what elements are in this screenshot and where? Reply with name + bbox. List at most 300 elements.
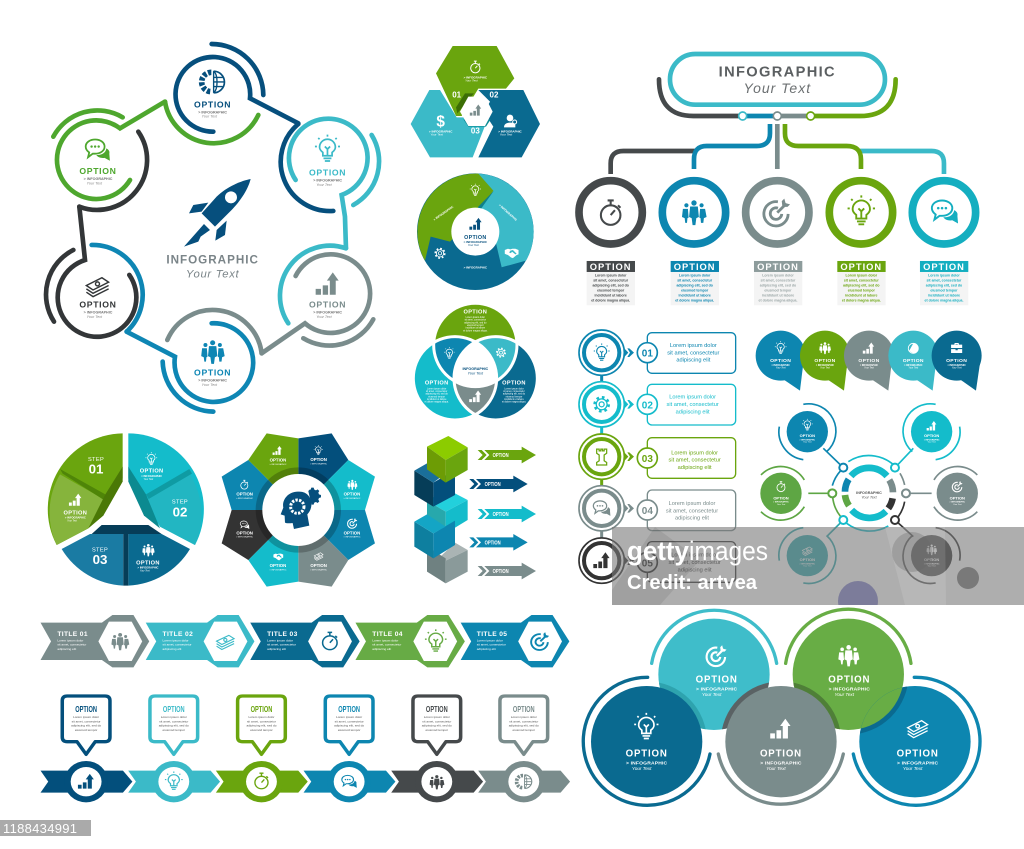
satellite green: Your Text xyxy=(777,503,786,506)
title 01: TITLE 01 xyxy=(57,631,88,638)
venn right text: incididunt ut labore xyxy=(504,398,524,401)
node 2 teal ring xyxy=(280,119,379,323)
step 5 xyxy=(391,696,483,802)
upper circle green xyxy=(793,619,904,730)
watermark brand: getty xyxy=(627,536,689,566)
icon: chat xyxy=(86,140,110,161)
inner dark ring xyxy=(256,467,341,553)
row 1: adipiscing elit xyxy=(676,358,711,364)
icon: dollar: $ xyxy=(436,114,445,131)
label 2: Lorem ipsum dolor xyxy=(679,274,711,278)
outer arcs xyxy=(583,609,980,805)
option blue: > INFOGRAPHIC xyxy=(897,761,939,767)
satellite gray xyxy=(934,467,978,520)
option circle 1 xyxy=(579,181,642,244)
venn top circle xyxy=(434,303,517,387)
row 1 xyxy=(579,330,736,375)
title 02: adipiscing elit xyxy=(163,647,182,651)
arrow 4 xyxy=(469,534,528,551)
bubble 3: OPTION xyxy=(858,358,880,364)
lower circle blue xyxy=(859,686,971,797)
title 04: adipiscing elit xyxy=(372,647,391,651)
green segment xyxy=(48,433,123,545)
green inner wedge xyxy=(88,467,123,528)
satellite bright teal: > INFOGRAPHIC xyxy=(924,438,940,441)
segment labels: > INFOGRAPHIC xyxy=(236,536,254,539)
arrow 1 xyxy=(478,447,536,463)
icon: stopwatch xyxy=(471,61,480,73)
step 2: eiusmod tempor xyxy=(163,728,185,732)
row 1: 01 xyxy=(642,349,653,360)
teal inner wedge xyxy=(128,467,160,528)
title 01: Lorem ipsum dolor xyxy=(57,638,83,642)
title 05 xyxy=(461,615,569,667)
option dark blue: > INFOGRAPHIC xyxy=(626,761,668,767)
option teal: > INFOGRAPHIC xyxy=(696,687,738,693)
venn right text: sit amet, consectetur xyxy=(503,390,525,393)
panel: org chart xyxy=(579,54,976,305)
option gray: Your Text xyxy=(766,766,786,771)
panel: three-step pie xyxy=(48,433,204,586)
center title: INFOGRAPHIC xyxy=(166,253,259,266)
node 2 label xyxy=(309,167,346,187)
step 01: STEP xyxy=(88,457,104,463)
row 5: sit amet, consectetur xyxy=(669,560,721,566)
satellite bright teal xyxy=(903,404,960,460)
icon: chart xyxy=(316,272,339,295)
node 5 label: OPTION xyxy=(79,299,117,309)
option green: OPTION xyxy=(828,674,870,685)
segment labels: OPTION xyxy=(270,458,286,463)
bubble 4: OPTION xyxy=(903,358,924,364)
segment labels: OPTION xyxy=(236,530,253,535)
panel: eight-point gear wheel xyxy=(222,433,375,587)
node 5 label: > INFOGRAPHIC xyxy=(84,310,113,314)
label 2: eiusmod tempor xyxy=(681,288,709,292)
panel: title chain xyxy=(41,615,569,667)
node 5 dark ring xyxy=(46,132,147,337)
venn left circle xyxy=(413,337,497,420)
row 3: sit amet, consectetur xyxy=(669,458,721,464)
bubble 4: Your Text xyxy=(908,367,919,370)
option people: OPTION xyxy=(136,560,160,566)
venn left text: Lorem ipsum dolor xyxy=(427,387,447,390)
teal segment xyxy=(475,174,534,267)
hexagon blue xyxy=(478,90,540,157)
hexagon green xyxy=(436,46,514,116)
step 3: sit amet, consectetur xyxy=(247,719,276,723)
step 3: OPTION xyxy=(251,704,272,714)
center title xyxy=(166,253,259,280)
option bulb xyxy=(140,452,163,481)
arrow 5: OPTION xyxy=(493,569,509,575)
icon: chart xyxy=(469,391,481,402)
bubble 1 xyxy=(756,331,806,391)
option teal: OPTION xyxy=(696,674,738,685)
venn top text: Lorem ipsum dolor xyxy=(466,316,485,319)
row 4 xyxy=(579,486,736,531)
label 5: eiusmod tempor xyxy=(930,288,958,292)
title 01 xyxy=(41,615,149,667)
row 3: adipiscing elit xyxy=(678,465,712,471)
segment labels: > INFOGRAPHIC xyxy=(310,462,327,465)
white separators xyxy=(413,303,537,420)
label 3: Lorem ipsum dolor xyxy=(762,274,794,278)
step 1: Lorem ipsum dolor xyxy=(73,715,99,719)
satellite dark: OPTION xyxy=(924,557,939,562)
step 5: adipiscing elit, sed do xyxy=(422,724,452,728)
branch lines xyxy=(611,124,944,174)
wheel segments xyxy=(222,433,375,587)
icon: chart xyxy=(469,218,482,230)
bubble 2: OPTION xyxy=(814,358,836,364)
row 2: 02 xyxy=(642,400,653,411)
title 01: sit amet, consectetur xyxy=(57,643,86,647)
hub ring segments xyxy=(845,468,893,518)
panel: circular three-part pie xyxy=(417,173,534,290)
row 1: sit amet, consectetur xyxy=(667,350,720,356)
segment labels: > INFOGRAPHIC xyxy=(344,536,361,539)
option people: > INFOGRAPHIC xyxy=(138,566,159,570)
bubble 2 xyxy=(800,331,850,391)
segment labels: OPTION xyxy=(270,563,286,568)
label 5: et dolore magna aliqua. xyxy=(925,298,963,302)
venn left text: et dolore magna aliqua. xyxy=(424,401,449,404)
option blue: OPTION xyxy=(897,748,939,759)
hexagon captions: Your Text xyxy=(465,79,478,83)
hexagon captions xyxy=(429,75,523,137)
step 1: adipiscing elit, sed do xyxy=(71,724,101,728)
node 3 label: OPTION xyxy=(309,299,346,309)
label 5: incididunt ut labore xyxy=(928,293,960,297)
step 2 xyxy=(128,696,220,802)
satellite dark xyxy=(903,528,960,583)
step 2: OPTION xyxy=(163,704,185,714)
venn top text: et dolore magna aliqua. xyxy=(463,329,488,332)
step 1: OPTION xyxy=(75,704,97,714)
satellite teal: Your Text xyxy=(803,565,812,568)
arrow 3: OPTION xyxy=(493,512,509,518)
teal segment xyxy=(128,433,204,545)
segment labels: OPTION xyxy=(310,457,327,462)
row 1: Lorem ipsum dolor xyxy=(670,343,717,349)
segment labels xyxy=(236,457,361,571)
option circle 3 xyxy=(746,181,809,244)
option green xyxy=(828,645,870,697)
bubble 5: > INFOGRAPHIC xyxy=(947,364,966,367)
label 2: et dolore magna aliqua. xyxy=(675,298,714,302)
node 5 label xyxy=(79,299,117,319)
icon: rocket xyxy=(184,179,251,247)
node 1 label: Your Text xyxy=(202,115,218,119)
title 03 xyxy=(250,615,360,667)
row 5: Lorem ipsum dolor xyxy=(671,553,718,559)
hexagon captions: Your Text xyxy=(500,133,512,137)
label 2: incididunt ut labore xyxy=(678,293,711,297)
light green lower part xyxy=(50,474,103,545)
arrow 2: OPTION xyxy=(485,482,501,488)
venn right text: Lorem ipsum dolor xyxy=(504,387,524,390)
step 5: OPTION xyxy=(426,704,448,714)
row 2 xyxy=(579,382,736,427)
icon: user search xyxy=(504,115,517,127)
step 3 xyxy=(216,696,308,802)
label 2: sit amet, consectetur xyxy=(677,279,713,283)
step 6: OPTION xyxy=(513,704,535,714)
node 4 label: > INFOGRAPHIC xyxy=(198,378,227,382)
step 01: 01 xyxy=(89,462,104,477)
option gray: > INFOGRAPHIC xyxy=(760,761,802,767)
option dark blue: OPTION xyxy=(626,748,668,759)
icon: head gear xyxy=(435,249,445,258)
label 3: eiusmod tempor xyxy=(764,288,792,292)
title 05: adipiscing elit xyxy=(477,647,496,651)
panel: stacked cubes and arrows xyxy=(414,436,536,583)
row 5: 05 xyxy=(642,558,653,569)
row 2: sit amet, consectetur xyxy=(667,402,719,408)
panel: callout timeline xyxy=(41,696,570,802)
option chart: OPTION xyxy=(63,510,87,516)
label 4: eiusmod tempor xyxy=(848,288,875,292)
option dark blue xyxy=(626,713,668,771)
center label: > INFOGRAPHIC xyxy=(464,240,488,244)
step 1: eiusmod tempor xyxy=(75,728,97,732)
blue inner band xyxy=(92,525,162,586)
node 2 label: Your Text xyxy=(316,183,333,187)
label 5 xyxy=(920,261,968,305)
row 4: sit amet, consectetur xyxy=(666,508,718,514)
label 1: sit amet, consectetur xyxy=(593,279,629,283)
label 5: OPTION xyxy=(923,262,965,272)
icon: gear head xyxy=(497,348,505,357)
watermark brand: images xyxy=(689,536,768,566)
venn top text: adipiscing elit, sed do xyxy=(464,321,487,324)
hub label xyxy=(856,491,882,500)
step 6 xyxy=(478,696,570,802)
node 3 label xyxy=(309,299,346,319)
satellite teal: OPTION xyxy=(800,557,815,562)
row 4: 04 xyxy=(642,506,653,517)
number labels: 03 xyxy=(471,127,480,136)
option blue xyxy=(897,721,939,771)
step 1 xyxy=(41,696,132,802)
segment icons xyxy=(240,445,357,560)
cube teal xyxy=(427,489,468,533)
row 3 xyxy=(579,434,736,479)
overlap left-right xyxy=(456,383,495,413)
satellite teal xyxy=(779,528,836,583)
satellite blue: Your Text xyxy=(803,441,812,444)
venn top text: OPTION xyxy=(463,309,487,315)
hexagon captions: > INFOGRAPHIC xyxy=(429,129,453,133)
satellite gray: OPTION xyxy=(950,495,965,500)
label 3: incididunt ut labore xyxy=(762,293,794,297)
segment labels: > INFOGRAPHIC xyxy=(310,568,327,571)
node 6 label: OPTION xyxy=(79,166,117,176)
step 6: eiusmod tempor xyxy=(513,728,535,732)
icon: bulb check xyxy=(444,347,455,358)
venn center label: INFOGRAPHIC xyxy=(463,367,488,371)
hub nodes xyxy=(828,464,910,524)
option teal xyxy=(696,645,738,697)
option chart xyxy=(63,494,87,523)
accent dark green xyxy=(456,93,474,113)
node 4 label: OPTION xyxy=(194,367,231,377)
title 02: sit amet, consectetur xyxy=(163,643,192,647)
panel: hub network xyxy=(760,404,978,583)
node 1 dark blue ring xyxy=(176,44,333,211)
segment labels: > INFOGRAPHIC xyxy=(270,463,287,466)
node 1 label: OPTION xyxy=(194,99,231,109)
venn top text: eiusmod tempor xyxy=(467,324,484,327)
step 03: 03 xyxy=(93,552,107,567)
icon: handshake xyxy=(505,249,519,258)
option gray: OPTION xyxy=(760,748,802,759)
label 3 xyxy=(754,261,802,305)
panel: numbered list xyxy=(579,330,736,583)
satellite bright teal: OPTION xyxy=(924,433,939,438)
pill subheading: Your Text xyxy=(744,80,811,96)
center label xyxy=(464,235,488,247)
step 4: sit amet, consectetur xyxy=(335,719,364,723)
node 4 blue ring xyxy=(92,245,253,412)
segment labels: > INFOGRAPHIC xyxy=(344,497,361,500)
center label: Your Text xyxy=(468,243,479,247)
green divider xyxy=(60,469,105,500)
row 4: Lorem ipsum dolor xyxy=(669,501,716,507)
label 1: incididunt ut labore xyxy=(594,293,627,297)
panel: five overlapping circles xyxy=(583,609,980,805)
blue segment xyxy=(417,173,534,290)
node 4 label: Your Text xyxy=(202,383,218,387)
icon: money xyxy=(86,278,109,297)
panel: six-node ring cycle xyxy=(46,44,379,412)
bubble 3: Your Text xyxy=(864,367,874,370)
node 6 label: Your Text xyxy=(87,182,103,186)
label 4: sit amet, consectetur xyxy=(844,279,879,283)
label 5: sit amet, consectetur xyxy=(927,279,962,283)
step 4 xyxy=(304,696,395,802)
option chart: Your Text xyxy=(67,520,77,523)
cube blue xyxy=(414,514,455,558)
venn right text xyxy=(502,380,527,404)
icon: people xyxy=(201,340,225,364)
row 2: adipiscing elit xyxy=(676,409,710,415)
number labels: 01 xyxy=(452,90,462,99)
step 5: sit amet, consectetur xyxy=(422,719,451,723)
accent dark teal xyxy=(463,119,491,127)
step 4: eiusmod tempor xyxy=(338,728,360,732)
satellite gray: > INFOGRAPHIC xyxy=(949,501,966,504)
step 1: sit amet, consectetur xyxy=(72,719,101,723)
label 2: OPTION xyxy=(674,262,716,272)
watermark brand xyxy=(627,536,768,566)
step 03: STEP xyxy=(92,548,108,554)
label 4: OPTION xyxy=(840,262,882,272)
connectors xyxy=(597,373,606,538)
node 3 gray ring xyxy=(167,254,373,353)
title 04: Lorem ipsum dolor xyxy=(372,638,398,642)
option chart: > INFOGRAPHIC xyxy=(65,516,86,520)
venn right text: et dolore magna aliqua. xyxy=(502,401,527,404)
step 4: adipiscing elit, sed do xyxy=(334,724,364,728)
bubble 5 xyxy=(932,331,982,391)
image id tag: 1188434991 xyxy=(3,821,77,836)
arrow 5 xyxy=(478,563,536,579)
label 4: incididunt ut labore xyxy=(845,293,878,297)
title 02: TITLE 02 xyxy=(163,631,193,638)
satellite dark: Your Text xyxy=(927,565,936,568)
step 5: Lorem ipsum dolor xyxy=(424,715,450,719)
label 3: adipiscing elit, sed do xyxy=(760,284,796,288)
overlap bands xyxy=(659,682,769,730)
satellite green: OPTION xyxy=(773,495,789,500)
option bulb: Your Text xyxy=(143,478,154,481)
number labels xyxy=(452,90,499,136)
title 02: Lorem ipsum dolor xyxy=(163,638,189,642)
bus nodes xyxy=(739,112,815,120)
segment labels: OPTION xyxy=(236,492,253,497)
row 5: adipiscing elit xyxy=(678,567,712,573)
green overlap over blue xyxy=(860,686,908,734)
title 05: TITLE 05 xyxy=(477,631,507,638)
label 2 xyxy=(671,261,719,305)
green segment xyxy=(417,174,493,261)
node 1 label: > INFOGRAPHIC xyxy=(198,110,227,114)
panel: three hexagons xyxy=(411,46,540,157)
satellite teal: > INFOGRAPHIC xyxy=(800,562,816,565)
label 1: adipiscing elit, sed do xyxy=(592,284,629,288)
segment captions: > INFOGRAPHIC xyxy=(464,266,488,270)
teal lower part xyxy=(147,474,201,545)
hub label: Your Text xyxy=(861,496,878,500)
label 5: Lorem ipsum dolor xyxy=(928,274,960,278)
venn left text: eiusmod tempor xyxy=(428,395,445,398)
icon: bulb xyxy=(470,184,481,195)
icon: head inner gear xyxy=(291,500,304,513)
hexagon captions: > INFOGRAPHIC xyxy=(464,75,488,79)
label 3: OPTION xyxy=(757,262,799,272)
icon: bulb xyxy=(315,135,340,161)
hub label: INFOGRAPHIC xyxy=(856,491,882,495)
venn center label xyxy=(463,367,488,375)
icon: gear globe xyxy=(202,71,224,93)
bubble 2: Your Text xyxy=(820,367,830,370)
venn left text: sit amet, consectetur xyxy=(426,390,448,393)
venn right text: OPTION xyxy=(502,380,526,386)
node 4 label xyxy=(194,367,231,387)
segment labels: > INFOGRAPHIC xyxy=(270,568,287,571)
title 05: sit amet, consectetur xyxy=(477,643,506,647)
lower circle dark blue xyxy=(591,686,702,797)
watermark credit: Credit: artvea xyxy=(627,572,758,594)
title 02 xyxy=(146,615,254,667)
lower circle gray xyxy=(725,686,837,797)
satellite bright teal: Your Text xyxy=(927,441,936,444)
title 01: adipiscing elit xyxy=(57,647,76,651)
bubble 3: > INFOGRAPHIC xyxy=(860,364,878,367)
label 3: sit amet, consectetur xyxy=(761,279,796,283)
option dark blue: Your Text xyxy=(632,766,652,771)
venn top text: incididunt ut labore xyxy=(466,327,486,330)
venn center label: Your Text xyxy=(468,371,484,375)
bus lines xyxy=(659,79,896,116)
cube gray xyxy=(427,543,468,583)
cube dark blue xyxy=(414,463,455,507)
title 03: adipiscing elit xyxy=(267,647,286,651)
icon: head with gears xyxy=(281,488,321,529)
option green: Your Text xyxy=(835,692,855,697)
